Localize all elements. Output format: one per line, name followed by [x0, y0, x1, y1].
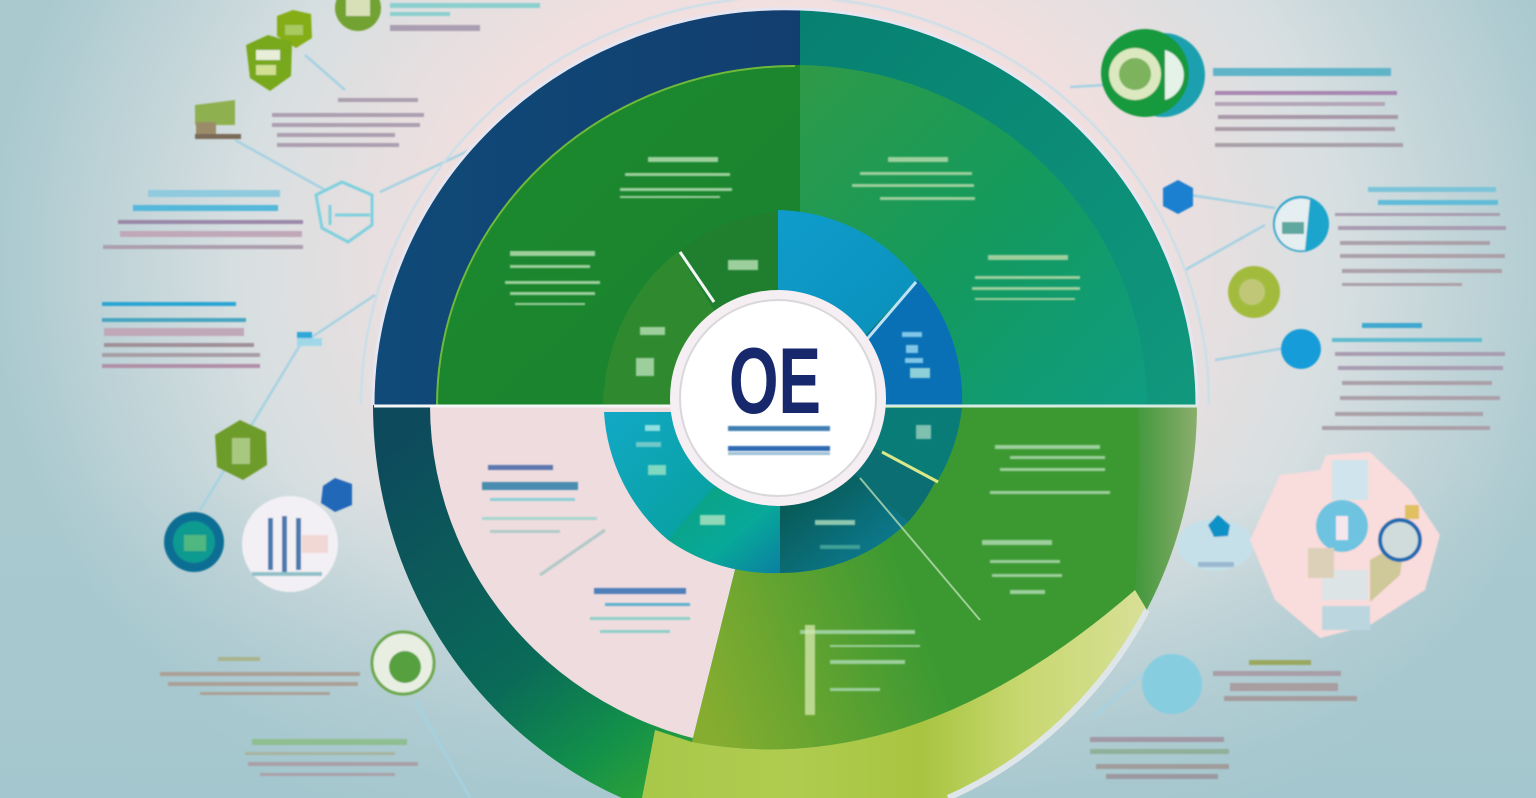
icon: olive hexagon — [277, 10, 312, 48]
icon: teal globe — [1273, 196, 1329, 252]
text block: top — [390, 3, 540, 31]
text block: upper left — [272, 98, 424, 147]
segment: green top — [678, 212, 778, 320]
icon: olive hexagon large — [246, 35, 292, 91]
segment: teal left — [604, 412, 720, 540]
pale panel text — [482, 465, 690, 633]
right text blocks — [1090, 68, 1506, 779]
badge subtitle lines — [728, 426, 830, 455]
icon: green badge top — [335, 0, 381, 31]
centre badge — [670, 290, 886, 506]
text block: bottom right 1 — [1213, 660, 1357, 701]
icon: blue node small — [321, 478, 352, 512]
lime band rim — [948, 610, 1147, 798]
text block: bottom left 2 — [245, 739, 418, 776]
text block: top right — [1213, 68, 1403, 147]
divider lines — [374, 252, 1198, 620]
icon: blue hexagon — [1163, 180, 1193, 214]
inner disc top-right — [800, 65, 1134, 404]
segment: dark teal right — [850, 440, 936, 522]
inner ring — [603, 210, 962, 573]
icon: pink cluster — [1250, 452, 1440, 638]
icon: blue node — [297, 332, 322, 346]
icon: white chart circle — [242, 496, 338, 592]
icon: small blue node with pale cloud — [1177, 515, 1253, 571]
segment: teal right — [860, 408, 962, 480]
icons left — [164, 0, 434, 694]
rim highlight — [437, 66, 795, 405]
text block: mid left — [103, 190, 303, 249]
outer ring top-right — [800, 10, 1196, 404]
lime outer band — [642, 590, 1147, 798]
icon: laptop — [195, 100, 241, 139]
segment: blue top — [778, 210, 918, 340]
text block: right 3 — [1322, 323, 1505, 430]
segment labels — [505, 157, 1110, 715]
connector lines — [200, 0, 1285, 798]
outer ring bottom-right — [800, 408, 1197, 748]
icon: outline hexagon — [316, 182, 372, 242]
text block: bottom left 1 — [160, 657, 360, 695]
icons right — [1101, 29, 1440, 714]
inner disc bottom-right green — [692, 405, 1139, 749]
left text blocks — [102, 3, 540, 776]
segment: blue right — [800, 280, 962, 405]
icon: light blue sphere — [1142, 654, 1202, 714]
segment: teal-green bottom — [668, 480, 780, 573]
segment: green left — [603, 250, 720, 405]
outer ring top-left — [374, 10, 800, 404]
badge title: OE — [729, 328, 821, 433]
segment: dark teal bottom — [780, 470, 908, 573]
outer ring highlight — [373, 9, 1197, 405]
icon: teal circle — [164, 512, 224, 572]
text block: bottom right 2 — [1090, 737, 1229, 779]
inner disc top-left — [438, 65, 800, 404]
icon: green ring — [372, 632, 434, 694]
inner disc bottom-left pale — [430, 408, 735, 738]
text block: lower left — [102, 302, 260, 368]
text block: right 2 — [1335, 187, 1506, 286]
icon: olive circle — [215, 420, 267, 480]
icon: green ring top right — [1101, 29, 1205, 117]
icon: blue dot — [1281, 329, 1321, 369]
outer ring bottom-left — [373, 405, 800, 798]
icon: olive dot — [1228, 266, 1280, 318]
